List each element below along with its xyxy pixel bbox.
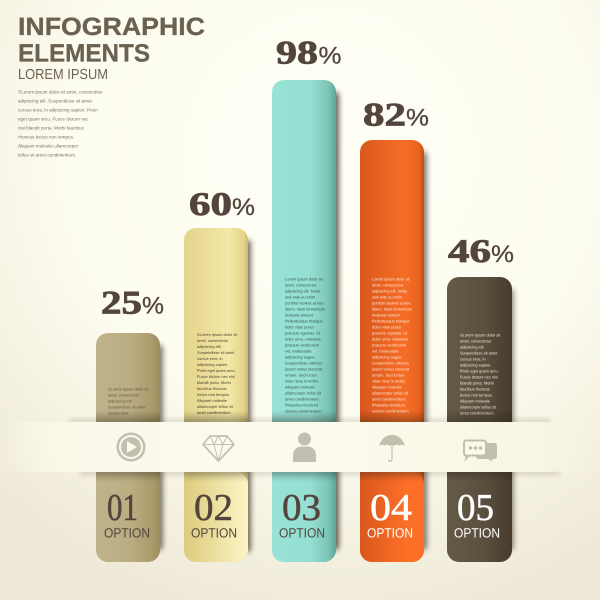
bar 2 text: Aliquam molestie — [197, 398, 228, 403]
bar 3 — [272, 80, 339, 562]
intro text block: rhoncus lectus non tempus. — [18, 134, 74, 140]
label 01 — [104, 487, 150, 540]
bar 3 text: ullamcorper tellus sit — [285, 390, 322, 396]
bar 3 text: Lorem ipsum dolor sit — [285, 276, 324, 282]
intro text block: eget quam arcu. Fusce dictum nec — [18, 116, 89, 122]
label 03: 03 — [282, 487, 321, 529]
bar 5 text: blandit porta. Morbi — [460, 380, 494, 386]
bar 5 text: amet, consectetur — [460, 338, 492, 344]
bar 2 text: blandit porta. Morbi — [197, 380, 231, 385]
bar 3 text: adipiscing elit. Nulla — [285, 288, 321, 294]
bar 4 text: Phasellus tincidunt — [372, 402, 406, 408]
bar 5 text: faucibus rhoncus — [460, 386, 490, 392]
bar 4 text: amet, consectetur — [372, 282, 404, 288]
bar 4 text: adipiscing augue. — [372, 354, 403, 360]
bar 2 text: amet, consectetur — [197, 338, 229, 343]
bar 4 text: libero. Nam fermentum — [372, 306, 413, 312]
value 98%: % — [318, 42, 342, 70]
label 01: OPTION — [104, 526, 150, 540]
value 60%: 60 — [189, 187, 232, 223]
title: INFOGRAPHIC — [18, 13, 205, 41]
bar 4 text: adipiscing elit. Nulla — [372, 288, 408, 294]
value 46%: 46 — [448, 234, 491, 270]
bar 4 text: Lorem ipsum dolor sit — [372, 276, 411, 282]
bar 5 text: adipiscing sapien. — [460, 362, 491, 368]
intro text block: tellus sit amet condimentum. — [18, 152, 76, 158]
label 01: 01 — [107, 487, 138, 529]
bar 3 text: ipsum varius placerat — [285, 366, 323, 372]
bar 2 text: adipiscing sapien. — [197, 362, 228, 367]
bar 3 text: Aliquam molestie — [285, 384, 316, 390]
bar 4 text: Suspendisse ultricies — [372, 360, 409, 366]
bar 5 — [447, 277, 514, 562]
bar 3 text: amet condimentum. — [285, 396, 320, 402]
bar 3 text: posuere vestibulum — [285, 342, 320, 348]
bar 1 text: SLorem ipsum dolor sit — [108, 386, 149, 392]
bar 4 text: ornare. Sed luctus — [372, 372, 404, 378]
bar 3 text: viverra condimentum. — [285, 408, 323, 414]
value 25%: 25 — [101, 286, 142, 322]
label 02 — [191, 487, 237, 540]
label 04: 04 — [370, 487, 412, 529]
bar 2 text: Fusce dictum nec nisi — [197, 374, 235, 379]
bar 4 text: ipsum varius placerat — [372, 366, 410, 372]
bar 3 text: sed ante eu enim — [285, 294, 316, 300]
value 60% — [189, 187, 255, 223]
bar 3 text: ornare. Sed luctus — [285, 372, 317, 378]
intro text block: adipiscing elit. Suspendisse sit amet — [18, 98, 93, 104]
bar 5 text: adipiscing elit. — [460, 344, 485, 350]
title: ELEMENTS — [18, 40, 150, 68]
icon: umbrella — [379, 435, 405, 461]
bar 5 text: SLorem ipsum dolor sit — [460, 332, 501, 338]
bar 3 text: vel, malesuada — [285, 348, 312, 354]
bar 4 text: vitae risus in mollis. — [372, 378, 406, 384]
bar 5 text: Proin eget quam arcu. — [460, 368, 499, 374]
bar 2 text: faucibus rhoncus — [197, 386, 227, 391]
bar 4 text: dolor vitae purus — [372, 324, 401, 330]
value 46% — [448, 234, 514, 270]
value 25%: % — [142, 292, 164, 320]
bar 5 text: Suspendisse sit amet — [460, 350, 498, 356]
intro text block: SLorem ipsum dolor sit amet, consectetur — [18, 90, 103, 94]
bar 2 text: Suspendisse sit amet — [197, 350, 235, 355]
value 98%: 98 — [276, 36, 318, 72]
label 05 — [454, 487, 500, 540]
bar 3 text: dolor vitae purus — [285, 324, 314, 330]
icon: chat bubbles — [464, 440, 497, 462]
bar 2 text: adipiscing elit. — [197, 344, 222, 349]
bar 2 text: SLorem ipsum dolor sit — [197, 332, 238, 337]
value 60%: % — [232, 194, 255, 221]
bar 4 text: sed ante eu enim — [372, 294, 403, 300]
label 05: 05 — [457, 487, 494, 529]
label 03 — [279, 487, 325, 540]
label 02: OPTION — [191, 526, 237, 540]
bar 4 text: posuere egestas. Ut — [372, 330, 408, 336]
icon: play — [117, 432, 146, 462]
intro text block: nisi blandit porta. Morbi faucibus — [18, 126, 85, 130]
bar 3 text: amet, consectetur — [285, 282, 317, 288]
bar 5 text: amet condimentum. — [460, 410, 495, 416]
bar 3 text: Phasellus tincidunt — [285, 402, 319, 408]
bar 4 text: Aliquam molestie — [372, 384, 403, 390]
bar 1 text: cursus eros. — [108, 410, 129, 416]
value 82% — [363, 98, 429, 134]
label 02: 02 — [194, 487, 233, 529]
intro text block: Aliquam molestie ullamcorper — [18, 144, 79, 148]
title: LOREM IPSUM — [18, 67, 108, 83]
icon: person — [293, 432, 316, 462]
icon: diamond — [203, 436, 234, 461]
bar 2 text: amet condimentum. — [197, 410, 232, 415]
bar 3 text: dolor urna, vulputate — [285, 336, 322, 342]
bar 4 text: posuere vestibulum — [372, 342, 407, 348]
bar 2 text: Proin eget quam arcu. — [197, 368, 236, 373]
value 82%: % — [406, 104, 429, 132]
intro text block: cursus eros, in adipiscing sapien. Proin — [18, 108, 98, 112]
bar 4 text: ullamcorper tellus sit — [372, 390, 409, 396]
bar 3 text: posuere egestas. Ut — [285, 330, 321, 336]
label 04 — [367, 487, 413, 540]
value 46%: % — [491, 241, 514, 268]
bar 3 text: porttitor laoreet at non — [285, 300, 324, 306]
white band — [0, 422, 600, 472]
bar 4 text: molestie tempor. — [372, 312, 401, 318]
bar 4 text: amet condimentum. — [372, 396, 407, 402]
bar 4 text: vel, malesuada — [372, 348, 399, 354]
bar 4 text: porttitor laoreet at non — [372, 300, 411, 306]
bar 5 text: Fusce dictum nec nisi — [460, 374, 498, 380]
bar 1 text: Suspendisse sit amet — [108, 404, 146, 410]
bar 3 text: molestie tempor. — [285, 312, 314, 318]
bar 1 text: adipiscing elit. — [108, 398, 133, 404]
value 98% — [276, 36, 342, 72]
bar 4 — [360, 140, 427, 562]
bar 5 text: ullamcorper tellus sit — [460, 404, 497, 410]
bar 1 — [96, 333, 163, 562]
bar 5 text: Aliquam molestie — [460, 398, 491, 404]
value 82%: 82 — [363, 98, 406, 134]
label 05: OPTION — [454, 526, 500, 540]
bar 2 text: lectus non tempus. — [197, 392, 230, 397]
bar 3 text: libero. Nam fermentum — [285, 306, 326, 312]
bar 4 text: dolor urna, vulputate — [372, 336, 409, 342]
bar 2 — [184, 228, 251, 562]
title — [18, 13, 205, 83]
bar 4 text: viverra condimentum. — [372, 408, 410, 414]
label 03: OPTION — [279, 526, 325, 540]
bar 3 text: adipiscing augue. — [285, 354, 316, 360]
bar 5 text: lectus non tempus. — [460, 392, 493, 398]
bar 2 text: ullamcorper tellus sit — [197, 404, 234, 409]
bar 3 text: Suspendisse ultricies — [285, 360, 322, 366]
bar 3 text: Pellentesque tristique — [285, 318, 323, 324]
bar 4 text: Pellentesque tristique — [372, 318, 410, 324]
bar 5 text: cursus eros, in — [460, 356, 486, 362]
label 04: OPTION — [367, 526, 413, 540]
value 25% — [101, 286, 164, 322]
bar 2 text: cursus eros, in — [197, 356, 223, 361]
bar 3 text: vitae risus in mollis. — [285, 378, 319, 384]
bar 1 text: amet, consectetur — [108, 392, 140, 398]
